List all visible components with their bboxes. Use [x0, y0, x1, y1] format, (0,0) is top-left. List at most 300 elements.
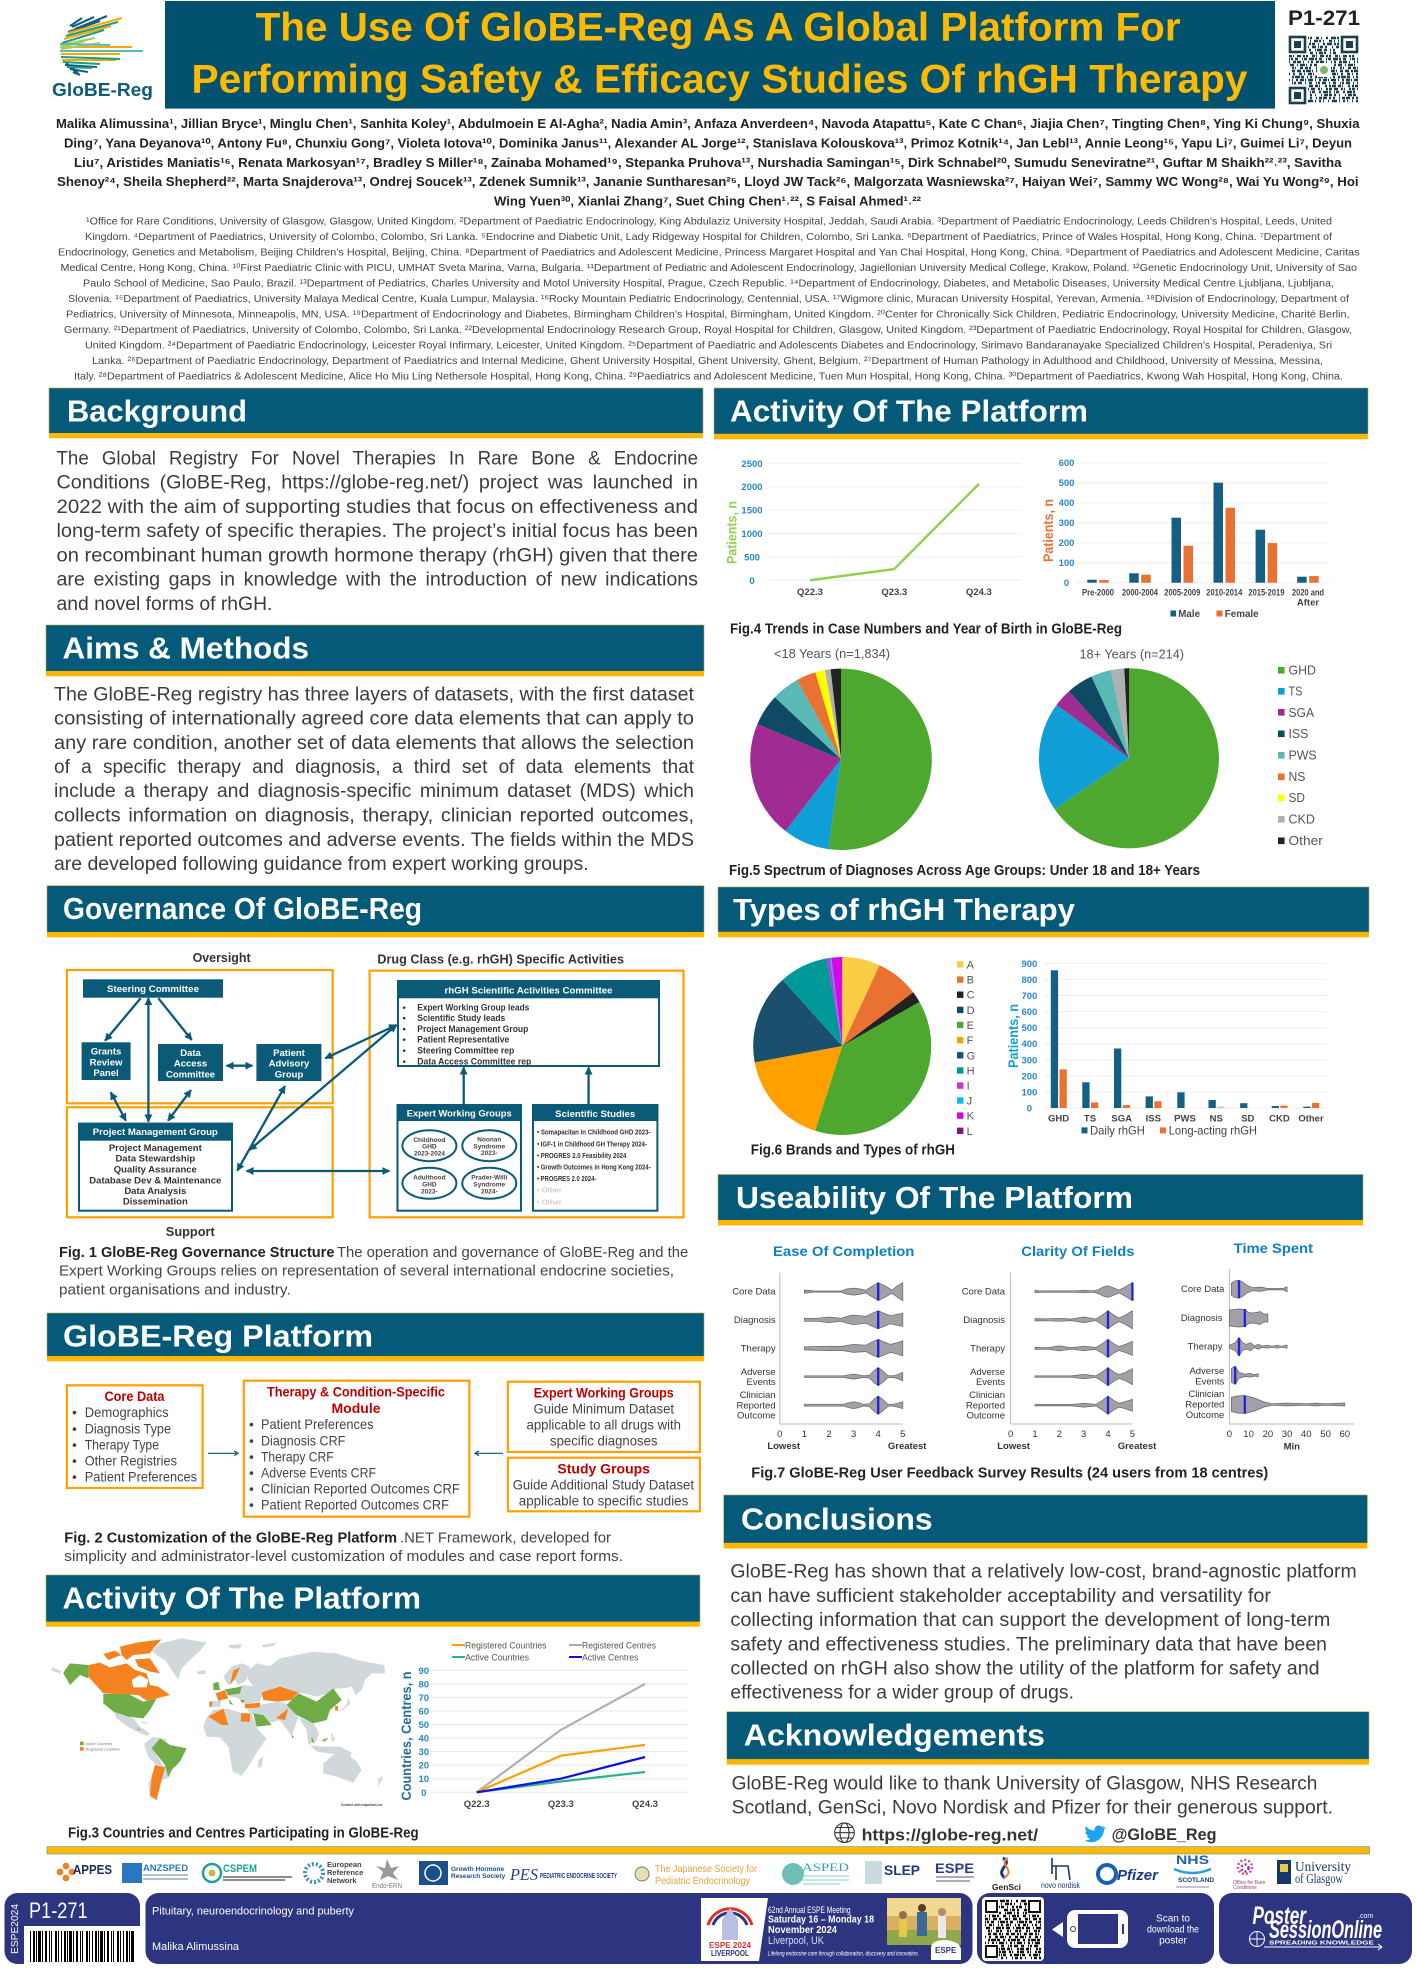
poster number: P1-271: [1288, 7, 1360, 30]
legend: brands: F: [967, 1035, 974, 1047]
text: background: 2022 with the aim of supporting studies that focus on effectiveness and: [56, 497, 698, 518]
text: background: Conditions (GloBE-Reg, https://globe-reg.net/) project was launched in: [56, 473, 698, 494]
logo: European Reference Network: [305, 1860, 363, 1885]
legend: diagnoses: SGA: [1288, 706, 1315, 720]
bar chart: daily vs long-acting: Long-acting rhGH: [1169, 1124, 1257, 1138]
heading: platform: GloBE-Reg Platform: [63, 1318, 373, 1354]
text: scan to download: download the: [1147, 1924, 1199, 1936]
box: rhGH scientific activities committee: [397, 980, 660, 1067]
map: participating countries: Created with mapchart.net: [341, 1803, 383, 1807]
bar chart: daily vs long-acting: 500: [1021, 1023, 1037, 1034]
box: rhGH scientific activities committee: •: [402, 1056, 406, 1067]
box: rhGH scientific activities committee: Scientific Study leads: [417, 1013, 505, 1024]
line chart: patients over time: Q22.3: [797, 587, 823, 598]
icon: globe: [835, 1823, 854, 1842]
logo: Japanese Society: The Japanese Society for: [655, 1863, 757, 1875]
violin chart: clarity of fields: Clarity Of Fields: [1021, 1243, 1135, 1259]
bar chart: year of birth: 300: [1059, 518, 1074, 529]
heading: activity right: [714, 388, 1368, 439]
box: rhGH scientific activities committee: •: [402, 1035, 406, 1046]
box: therapy and condition module: Module: [332, 1400, 381, 1416]
pie chart: 18 plus: [1039, 647, 1219, 848]
box: expert working groups: Syndrome: [473, 1144, 506, 1150]
box: patient advisory group: [256, 1044, 321, 1081]
logo: GenSci: GenSci: [992, 1882, 1021, 1892]
logo: Japanese Society: Pediatric Endocrinology: [655, 1875, 751, 1887]
violin chart: clarity of fields: Diagnosis: [963, 1315, 1005, 1326]
text: aims and methods: consisting of internationally agreed core data elements that can apply to: [54, 708, 694, 730]
box: expert working groups: [396, 1104, 522, 1211]
bar chart: daily vs long-acting: 800: [1021, 975, 1037, 986]
box: study groups guide: [508, 1458, 700, 1511]
violin chart: time spent: 40: [1301, 1429, 1312, 1440]
box: patient advisory group: Advisory: [269, 1059, 310, 1070]
box: core data: Other Registries: [85, 1453, 177, 1469]
line chart: patients over time: 2000: [741, 482, 763, 493]
bar chart: daily vs long-acting: 0: [1027, 1104, 1032, 1114]
caption: figure 5: Fig.5 Spectrum of Diagnoses Across Age Groups: Under 18 and 18+ Years: [729, 863, 1200, 879]
map: participating countries: [52, 1638, 385, 1807]
violin chart: clarity of fields: [962, 1243, 1157, 1452]
heading: governance: Governance Of GloBE-Reg: [63, 891, 422, 926]
box: rhGH scientific activities committee: Project Management Group: [417, 1024, 528, 1035]
box: expert working groups guide: Expert Working Groups: [534, 1384, 674, 1400]
heading: useability: [718, 1174, 1363, 1226]
text: acknowledgements: [732, 1773, 1333, 1819]
violin chart: ease of completion: 0: [777, 1429, 782, 1440]
panel: types of rhGH therapy: [718, 887, 1369, 1158]
handle: twitter: @GloBE_Reg: [1112, 1825, 1216, 1844]
text: scan to download: poster: [1159, 1936, 1188, 1946]
affiliations: Medical Centre, Hong Kong, China. ¹⁰First Paediatric Clinic with PICU, UMHAT Sveta Marina, Varna, Bulgaria. ¹¹Department of Pediatric and Adolescent Endocrinology, Jagiellonian University Medical College, Krakow, Poland. ¹²Genetic Endocrinology Unit, University of Sao: [60, 262, 1357, 274]
box: scientific studies: • PROGRES 2.0 Feasibility 2024: [537, 1151, 627, 1160]
box: therapy and condition module: •: [249, 1416, 254, 1432]
box: core data: [67, 1385, 203, 1488]
box: scientific studies: • PROGRES 2.0 2024-: [537, 1174, 597, 1183]
logo: University of Glasgow: University: [1295, 1860, 1351, 1875]
violin chart: clarity of fields: Greatest: [1118, 1441, 1157, 1452]
logo: European Reference Network: European: [327, 1860, 362, 1869]
affiliations: Endocrinology, Genetics and Metabolism, Beijing Children's Hospital, Beijing, China. ⁸Department of Paediatrics and Adolescent Medicine, Princess Margaret Hospital and Yan Chai Hospital, Hong Kong, China. ⁹Department of Paediatrics and Adolescent Medicine, Caritas: [58, 247, 1360, 259]
violin chart: clarity of fields: 1: [1032, 1429, 1038, 1440]
box: therapy and condition module: •: [249, 1448, 254, 1464]
bar chart: daily vs long-acting: TS: [1084, 1114, 1096, 1124]
box: therapy and condition module: •: [249, 1465, 254, 1481]
badge: ESPE small: ESPE: [935, 1946, 957, 1955]
box: therapy and condition module: Patient Reported Outcomes CRF: [261, 1497, 449, 1513]
logo: ANZSPED: ANZSPED: [143, 1863, 188, 1874]
affiliations: Pediatrics, University of Minnesota, Minneapolis, MN, USA. ¹⁹Department of Endocrinology and Diabetes, Birmingham Children's Hospital, Birmingham, United Kingdom. ²⁰Center for Chronically Sick Children, Pediatric Endocrinology, University Medicine, Charité Berlin,: [66, 309, 1350, 321]
violin chart: ease of completion: Lowest: [767, 1441, 801, 1452]
box: core data: •: [72, 1469, 77, 1485]
box: expert working groups guide: Guide Minimum Dataset: [534, 1400, 674, 1416]
logo: PES: PES: [509, 1865, 538, 1884]
box: therapy and condition module: Adverse Events CRF: [261, 1465, 376, 1481]
violin chart: time spent: Time Spent: [1234, 1240, 1313, 1256]
violin chart: ease of completion: 2: [826, 1429, 832, 1440]
bar chart: daily vs long-acting: [1005, 959, 1327, 1138]
box: rhGH scientific activities committee: •: [402, 1013, 406, 1024]
heading: conclusions: [724, 1495, 1367, 1548]
line chart: countries and centres: Countries, Centres, n: [398, 1672, 414, 1800]
text: scan to download: Scan to: [1156, 1914, 1190, 1924]
caption: figure 1: patient organisations and industry.: [59, 1283, 291, 1299]
heading: platform: [47, 1313, 704, 1361]
box: rhGH scientific activities committee: Expert Working Group leads: [417, 1002, 529, 1013]
logo: Pfizer: Pfizer: [1117, 1867, 1159, 1884]
title banner: The Use Of GloBE-Reg As A Global Platform For: [256, 6, 1181, 50]
logo: Endo-ERN: Endo-ERN: [372, 1881, 402, 1890]
bar chart: year of birth: 500: [1059, 478, 1074, 489]
title banner: [165, 1, 1275, 109]
link: website: https://globe-reg.net/: [862, 1826, 1038, 1845]
logo: SLEP: [865, 1861, 920, 1884]
line chart: countries and centres: 0: [421, 1788, 426, 1799]
violin chart: clarity of fields: 5: [1130, 1429, 1135, 1440]
box: expert working groups: Childhood: [413, 1137, 445, 1144]
bar chart: daily vs long-acting: 400: [1021, 1039, 1037, 1050]
heading: activity left: Activity Of The Platform: [62, 1580, 421, 1615]
box: patient advisory group: Group: [275, 1070, 303, 1081]
logo: APPES: [57, 1862, 112, 1881]
legend: line chart: Registered Centres: [582, 1640, 656, 1652]
bar chart: daily vs long-acting: 700: [1021, 991, 1037, 1002]
legend: diagnoses: Other: [1288, 834, 1323, 848]
diagram: governance structure: Oversight: [193, 951, 251, 965]
text: background: are existing gaps in knowledge with the introduction of new indications: [56, 570, 698, 591]
box: project management group: Database Dev & Maintenance: [89, 1175, 221, 1186]
line chart: countries and centres: [398, 1640, 687, 1810]
logo: office for rare conditions: [1233, 1860, 1266, 1891]
panel: conclusions: [724, 1495, 1367, 1704]
logo: NHS Scotland: [1174, 1853, 1214, 1887]
violin chart: clarity of fields: 4: [1105, 1429, 1111, 1440]
bar chart: year of birth: Patients, n: [1040, 499, 1056, 562]
violin chart: clarity of fields: Clinician: [969, 1390, 1005, 1401]
legend: brands: [957, 959, 975, 1138]
bar chart: year of birth: Female: [1225, 609, 1259, 620]
legend: diagnoses: TS: [1288, 684, 1302, 698]
legend: brands: B: [967, 975, 974, 987]
logo: CSPEM: CSPEM: [223, 1863, 257, 1875]
box: core data: Patient Preferences: [85, 1469, 197, 1485]
line chart: countries and centres: 60: [419, 1706, 429, 1718]
box: scientific studies: • Growth Outcomes in Hong Kong 2024-: [537, 1162, 651, 1171]
logo: growth hormone research society: Growth Hormone: [451, 1866, 504, 1873]
legend: diagnoses: ISS: [1288, 727, 1308, 741]
box: rhGH scientific activities committee: •: [402, 1024, 406, 1035]
badge: ESPE 2024 Liverpool: [701, 1898, 768, 1961]
violin chart: time spent: 20: [1263, 1429, 1273, 1440]
affiliations: United Kingdom. ²⁴Department of Paediatric Endocrinology, Leicester Royal Infirmary, Leicester, United Kingdom. ²⁵Department of Paediatric and Adolescents Diabetes and Endocrinology, Sirimavo Bandaranayake Specialized Children's Hospital, Peradeniya, Sri: [85, 340, 1332, 352]
box: expert working groups: 2023-2024: [414, 1150, 445, 1157]
text: meeting details: Liverpool, UK: [768, 1935, 825, 1947]
legend: diagnoses: CKD: [1288, 812, 1315, 826]
box: therapy and condition module: •: [249, 1481, 254, 1497]
footer: poster session online logo: .com: [1358, 1913, 1373, 1920]
logo: ESPE: ESPE: [935, 1860, 974, 1876]
box: scientific studies: • Somapacitan in Childhood GHD 2023-: [537, 1128, 651, 1137]
icon: QR code footer: [982, 1897, 1044, 1961]
legend: brands: G: [967, 1050, 975, 1062]
affiliations: Kingdom. ⁴Department of Paediatrics, University of Colombo, Colombo, Sri Lanka. ⁵Endocrine and Diabetic Unit, Lady Ridgeway Hospital for Children, Colombo, Sri Lanka. ⁶Department of Paediatrics, Prince of Wales Hospital, Hong Kong, China. ⁷Department of: [85, 231, 1332, 243]
violin chart: ease of completion: Core Data: [732, 1287, 776, 1298]
panel: activity left: [46, 1575, 700, 1842]
bar chart: daily vs long-acting: 600: [1021, 1007, 1037, 1018]
violin chart: ease of completion: Diagnosis: [734, 1315, 776, 1326]
violin chart: clarity of fields: 0: [1008, 1429, 1013, 1440]
box: expert working groups: Syndrome: [473, 1181, 506, 1188]
box: rhGH scientific activities committee: rhGH Scientific Activities Committee: [444, 986, 612, 996]
heading: background: Background: [67, 394, 247, 429]
panel: aims and methods: [46, 625, 704, 875]
violin chart: ease of completion: Outcome: [737, 1411, 776, 1422]
text: aims and methods: [54, 684, 695, 875]
divider bar: gold strip: [47, 1847, 1370, 1854]
logo: European Reference Network: Network: [327, 1876, 357, 1885]
text: conclusions: GloBE-Reg has shown that a relatively low-cost, brand-agnostic platform: [730, 1562, 1357, 1583]
logo: GloBE-Reg: GloBE-Reg: [52, 80, 153, 100]
panel: background: [49, 388, 703, 615]
footer: poster id panel: P1-271: [29, 1898, 88, 1923]
text: conclusions: safety and effectiveness studies. The preliminary data that have been: [730, 1634, 1327, 1655]
line chart: countries and centres: 80: [419, 1679, 429, 1690]
bar chart: daily vs long-acting: 200: [1021, 1071, 1037, 1082]
logo: growth hormone research society: [419, 1861, 506, 1885]
line chart: countries and centres: 10: [419, 1774, 429, 1785]
text: conclusions: [730, 1562, 1357, 1704]
line chart: countries and centres: 40: [419, 1734, 429, 1745]
bar chart: daily vs long-acting: ISS: [1146, 1114, 1161, 1124]
bar chart: year of birth: After: [1297, 598, 1319, 608]
box: therapy and condition module: Therapy & Condition-Specific: [267, 1384, 445, 1400]
box: rhGH scientific activities committee: •: [402, 1002, 406, 1013]
logo: GenSci: [992, 1858, 1021, 1892]
caption: figure 2: [64, 1530, 623, 1565]
caption: figure 2: simplicity and administrator-level customization of modules and case report forms.: [64, 1549, 623, 1565]
authors: Shenoy²⁴, Sheila Shepherd²², Marta Snajderova¹³, Ondrej Soucek¹³, Zdenek Sumnik¹³, Jananie Suntharesan²⁵, Lloyd JW Tack²⁶, Malgorzata Wasniewska²⁷, Haiyan Wei⁷, Sammy WC Wong²⁸, Wai Yu Wong²⁹, Hoi: [57, 175, 1359, 189]
violin chart: clarity of fields: Lowest: [997, 1441, 1031, 1452]
caption: figure 4: Fig.4 Trends in Case Numbers and Year of Birth in GloBE-Reg: [730, 621, 1122, 637]
box: data access committee: Access: [174, 1059, 207, 1070]
box: project management group: Project Management: [109, 1143, 203, 1154]
violin chart: ease of completion: 5: [900, 1429, 905, 1440]
caption: figure 6: Fig.6 Brands and Types of rhGH: [751, 1142, 955, 1158]
map: participating countries: Registered Countries: [86, 1747, 120, 1751]
violin chart: ease of completion: Ease Of Completion: [773, 1243, 914, 1259]
footer: poster session online logo: Poster: [1252, 1902, 1307, 1930]
box: scientific studies: • IGF-1 in Childhood GH Therapy 2024-: [537, 1139, 647, 1148]
line chart: countries and centres: 70: [419, 1693, 429, 1704]
box: core data: •: [72, 1436, 77, 1452]
violin chart: time spent: Events: [1195, 1376, 1225, 1388]
line chart: countries and centres: Q22.3: [464, 1799, 490, 1810]
caption: figure 7: Fig.7 GloBE-Reg User Feedback Survey Results (24 users from 18 centres): [751, 1466, 1268, 1482]
logo: PES: [509, 1865, 617, 1884]
violin chart: time spent: 10: [1243, 1429, 1254, 1440]
logo: GloBE-Reg: [52, 16, 153, 100]
footer: poster id panel: [4, 1893, 140, 1964]
line chart: patients over time: 0: [749, 576, 755, 587]
box: patient advisory group: Patient: [273, 1048, 306, 1059]
violin chart: time spent: Reported: [1185, 1400, 1224, 1410]
badge: ESPE 2024 Liverpool: LIVERPOOL: [711, 1949, 749, 1958]
affiliations: [58, 216, 1360, 382]
authors: Ding⁷, Yana Deyanova¹⁰, Antony Fu⁸, Chunxiu Gong⁷, Violeta Iotova¹⁰, Dominika Janus¹¹, Alexander AL Jorge¹², Stanislava Kolouskova¹³, Primoz Kotnik¹⁴, Jan Lebl¹³, Annie Leong¹⁵, Yapu Li⁷, Guimei Li⁷, Deyun: [64, 136, 1352, 150]
violin chart: ease of completion: Clinician: [740, 1390, 776, 1401]
logo: University of Glasgow: of Glasgow: [1295, 1872, 1344, 1887]
box: core data: Core Data: [104, 1388, 165, 1404]
bar chart: year of birth: 2010-2014: [1206, 588, 1243, 598]
arrows: governance links: [105, 998, 589, 1171]
box: scientific studies: • Other: [537, 1197, 562, 1206]
box: rhGH scientific activities committee: Data Access Committee rep: [417, 1056, 531, 1067]
heading: useability: Useability Of The Platform: [736, 1180, 1133, 1215]
bar chart: year of birth: 2020 and: [1292, 588, 1324, 598]
violin chart: ease of completion: 1: [802, 1429, 807, 1440]
box: scientific studies: • Other: [537, 1186, 562, 1195]
bar chart: daily vs long-acting: 100: [1021, 1087, 1037, 1098]
legend: brands: I: [967, 1081, 970, 1093]
affiliations: Paulo School of Medicine, Sao Paulo, Brazil. ¹³Department of Pediatrics, Charles University and Motol University Hospital, Prague, Czech Republic. ¹⁴Department of Endocrinology, Diabetes, and Metabolic Diseases, University Medical Centre Ljubljana, Ljubljana,: [83, 278, 1334, 290]
legend: brands: J: [967, 1096, 972, 1108]
arrow: groups to module: [475, 1451, 503, 1456]
bar chart: daily vs long-acting: NS: [1210, 1114, 1223, 1124]
logo: NHS Scotland: NHS: [1176, 1853, 1209, 1867]
heading: aims and methods: [46, 625, 704, 676]
footer: topic and presenter panel: Malika Alimussina: [152, 1941, 240, 1953]
bar chart: daily vs long-acting: Patients, n: [1005, 1004, 1021, 1068]
box: rhGH scientific activities committee: Patient Representative: [417, 1035, 509, 1046]
bar chart: year of birth: 200: [1059, 538, 1074, 549]
line chart: patients over time: 1000: [741, 529, 763, 540]
footer: topic and presenter panel: Pituitary, neuroendocrinology and puberty: [152, 1906, 354, 1918]
box: expert working groups: GHD: [422, 1144, 437, 1151]
legend: brands: K: [967, 1111, 975, 1123]
box: project management group: [78, 1123, 233, 1211]
caption: figure 1: The operation and governance of GloBE-Reg and the: [337, 1245, 688, 1261]
text: aims and methods: are developed following guidance from expert working groups.: [54, 854, 589, 875]
violin chart: time spent: 0: [1227, 1429, 1232, 1440]
text: aims and methods: The GloBE-Reg registry has three layers of datasets, with the first dataset: [54, 684, 695, 705]
bar chart: daily vs long-acting: SGA: [1111, 1114, 1132, 1124]
legend: line chart: Registered Countries: [465, 1640, 547, 1652]
bar chart: daily vs long-acting: SD: [1241, 1114, 1255, 1124]
text: aims and methods: of a specific therapy and diagnosis, a third set of data elements that: [54, 757, 695, 778]
violin chart: clarity of fields: Core Data: [962, 1287, 1006, 1298]
box: study groups guide: Study Groups: [557, 1460, 650, 1476]
caption: figure 1: Expert Working Groups relies on representation of several international endocrine societies,: [59, 1264, 674, 1280]
legend: line chart: Active Centres: [582, 1652, 639, 1664]
panel: governance: [47, 886, 704, 1299]
logo: SLEP: SLEP: [884, 1862, 920, 1878]
box: therapy and condition module: [244, 1381, 469, 1517]
bar chart: daily vs long-acting: PWS: [1174, 1114, 1196, 1124]
violin chart: clarity of fields: Reported: [966, 1400, 1005, 1411]
box: expert working groups: Noonan: [477, 1136, 501, 1144]
heading: activity left: [46, 1575, 700, 1627]
line chart: countries and centres: 30: [419, 1747, 429, 1758]
authors: [56, 117, 1361, 208]
box: expert working groups: Expert Working Groups: [407, 1108, 512, 1120]
text: aims and methods: patient reported outcomes and adverse events. The fields within the MDS: [54, 830, 694, 851]
text: aims and methods: any rare condition, another set of data elements that allows the selection: [54, 733, 694, 754]
authors: Wing Yuen³⁰, Xianlai Zhang⁷, Suet Ching Chen¹˒²², S Faisal Ahmed¹˒²²: [494, 194, 921, 208]
violin chart: time spent: [1181, 1240, 1354, 1452]
icon: QR code top: [1287, 34, 1360, 106]
text: acknowledgements: Scotland, GenSci, Novo Nordisk and Pfizer for their generous support.: [732, 1798, 1333, 1819]
pie chart: under 18: <18 Years (n=1,834): [774, 647, 890, 661]
box: core data: •: [72, 1420, 77, 1436]
violin chart: ease of completion: Therapy: [741, 1343, 776, 1354]
logo: Pfizer: [1098, 1865, 1159, 1884]
bar chart: daily vs long-acting: CKD: [1269, 1114, 1290, 1124]
legend: brands: C: [967, 990, 975, 1002]
box: therapy and condition module: •: [249, 1497, 254, 1513]
violin chart: ease of completion: [732, 1243, 927, 1452]
box: core data: Demographics: [85, 1404, 169, 1420]
bar chart: year of birth: 100: [1059, 558, 1074, 569]
violin chart: ease of completion: 3: [851, 1429, 856, 1440]
affiliations: Germany. ²¹Department of Paediatrics, University of Colombo, Colombo, Sri Lanka. ²²Developmental Endocrinology Research Group, Royal Hospital for Children, Glasgow, United Kingdom. ²³Department of Paediatric Endocrinology, Royal Hospital for Children, Glasgow,: [64, 324, 1352, 336]
logo: University of Glasgow: [1277, 1860, 1351, 1887]
box: expert working groups guide: [508, 1382, 700, 1452]
text: meeting details: Saturday 16 – Monday 18: [768, 1914, 874, 1926]
box: grants review panel: Review: [90, 1057, 123, 1068]
diagram: governance structure: Drug Class (e.g. rhGH) Specific Activities: [377, 952, 624, 966]
box: expert working groups guide: applicable to all drugs with: [526, 1417, 681, 1433]
box: data access committee: Committee: [166, 1070, 215, 1081]
logo: European Reference Network: Reference: [327, 1868, 363, 1877]
text: background: long-term safety of specific therapies. The project’s initial focus has been: [56, 521, 698, 542]
text: meeting details: November 2024: [768, 1924, 837, 1936]
box: study groups guide: Guide Additional Study Dataset: [513, 1476, 694, 1492]
box: core data: Therapy Type: [85, 1436, 159, 1452]
text: background: and novel forms of rhGH.: [56, 594, 272, 615]
line chart: patients over time: Q23.3: [881, 587, 907, 598]
box: expert working groups: 2024-: [481, 1188, 498, 1195]
box: therapy and condition module: •: [249, 1432, 254, 1448]
box: expert working groups: Adulthood: [413, 1175, 446, 1182]
logo: CSPEM: [203, 1863, 292, 1882]
text: background: The Global Registry For Novel Therapies In Rare Bone & Endocrine: [56, 448, 698, 469]
bar chart: daily vs long-acting: 900: [1021, 959, 1037, 970]
line chart: patients over time: Patients, n: [724, 501, 740, 564]
box: therapy and condition module: Therapy CRF: [261, 1448, 334, 1464]
text: acknowledgements: GloBE-Reg would like to thank University of Glasgow, NHS Research: [732, 1773, 1317, 1794]
heading: types: Types of rhGH Therapy: [733, 892, 1076, 927]
legend: brands: H: [967, 1066, 975, 1078]
violin chart: time spent: Core Data: [1181, 1284, 1225, 1295]
box: expert working groups: 2023-: [481, 1150, 498, 1157]
violin chart: time spent: Min: [1284, 1442, 1300, 1452]
legend: brands: L: [967, 1126, 973, 1138]
logo: NHS Scotland: SCOTLAND: [1178, 1877, 1214, 1884]
bar chart: year of birth: [1040, 458, 1329, 620]
line chart: patients over time: Q24.3: [966, 587, 992, 598]
violin chart: clarity of fields: Events: [976, 1377, 1005, 1388]
photo: family playing: [887, 1898, 961, 1945]
bar chart: daily vs long-acting: Daily rhGH: [1090, 1124, 1145, 1138]
legend: diagnoses: PWS: [1288, 748, 1317, 762]
box: steering committee: Steering Committee: [107, 984, 199, 995]
caption: figure 1: [59, 1245, 688, 1299]
logo: ANZSPED: [122, 1863, 188, 1883]
violin chart: clarity of fields: Adverse: [970, 1367, 1005, 1378]
legend: diagnoses: GHD: [1288, 664, 1316, 678]
logo: Japanese Society: [635, 1863, 757, 1887]
text: background: [56, 448, 698, 615]
